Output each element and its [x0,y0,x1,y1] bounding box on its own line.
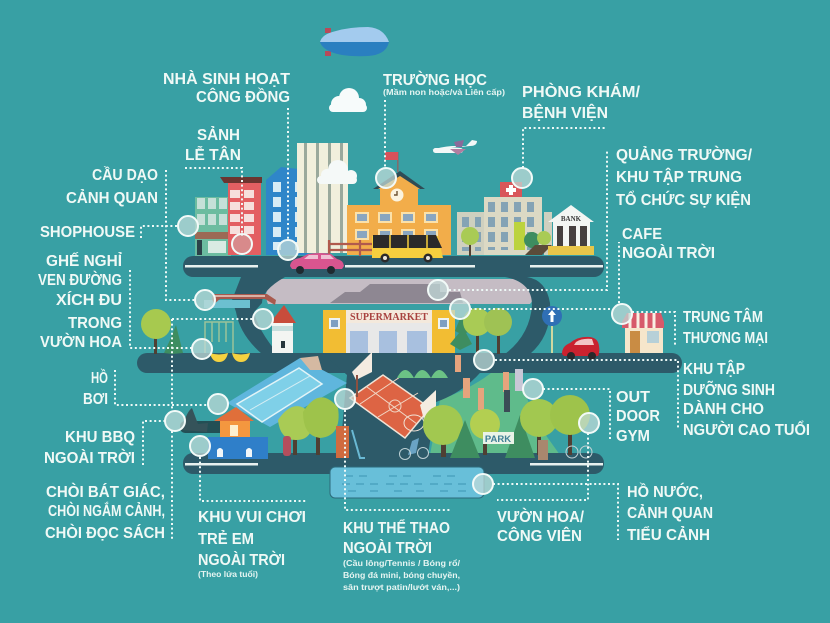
small house [270,305,296,353]
label: Vườn hoa công viên: VƯỜN HOA/ [497,508,585,526]
middle road and plaza [137,353,682,373]
cyclist [400,438,428,460]
pool [227,356,347,427]
park trees and sign: PARK [485,434,511,445]
label: Khu tập dưỡng sinh: DÀNH CHO [683,401,764,418]
label: Chòi: CHÒI BÁT GIÁC, [46,483,165,501]
dotted leader lines [115,100,678,540]
label: Hồ bơi: HỒ [91,369,108,387]
trees near hospital [461,222,552,256]
label: Nhà sinh hoạt cộng đồng: CÔNG ĐỒNG [196,88,290,106]
label: Quảng trường: TỔ CHỨC SỰ KIỆN [616,191,751,209]
label: Cầu dạo cảnh quan: CẢNH QUAN [66,190,158,207]
bottom road [183,453,604,474]
trees by playground [278,397,365,458]
label: Out door gym: GYM [616,428,650,445]
illustration: cloud on tower [317,160,357,184]
cafe [622,313,664,353]
road sign [542,306,562,353]
label: Hồ bơi [83,369,108,408]
label: Hồ nước: HỒ NƯỚC, [627,483,703,501]
label: Khu vui chơi trẻ em: KHU VUI CHƠI [198,509,306,526]
building: community red tower [220,177,262,255]
label: Khu thể thao ngoài trời: Bóng đá mini, bóng chuyền, [343,571,460,580]
label: Trung tâm thương mại: THƯƠNG MẠI [683,330,768,347]
label: Out door gym: DOOR [616,408,660,425]
fence [329,240,372,256]
bridge [204,294,276,308]
label: Trung tâm thương mại [683,308,768,347]
top road [183,256,604,277]
joggers [455,355,523,412]
label: Vườn hoa công viên: CÔNG VIÊN [497,527,582,545]
label: Quảng trường: KHU TẬP TRUNG [616,168,742,186]
label: Hồ nước [627,483,713,544]
curved ramps [232,277,285,354]
label: Khu BBQ: KHU BBQ [65,429,135,446]
label: Phòng khám: PHÒNG KHÁM/ [522,83,641,101]
trees behind supermarket [450,308,512,354]
label: Chòi: CHÒI NGẮM CẢNH, [48,502,165,520]
label: Ghế nghỉ, xích đu: VEN ĐƯỜNG [38,271,122,289]
building: bank [548,205,594,255]
supermarket: SUPERMARKET [350,312,428,323]
basketball court [350,352,436,438]
label: Trường học: (Mầm non hoặc/và Liên cấp) [383,88,505,97]
label: Hồ bơi: BƠI [83,391,108,408]
bushes [397,370,448,378]
label: Ghế nghỉ, xích đu: XÍCH ĐU [56,292,122,309]
illustration: plane [432,140,477,155]
pavilion [208,437,268,459]
label: Cầu dạo cảnh quan: CẦU DẠO [92,167,158,184]
hotspot markers [165,168,632,494]
label: Khu tập dưỡng sinh: KHU TẬP [683,360,745,378]
lake [330,467,484,498]
label: Hồ nước: CẢNH QUAN [627,505,713,522]
label: Cafe ngoài trời [622,226,715,262]
label: Khu thể thao ngoài trời [343,519,461,592]
label: Quảng trường: QUẢNG TRƯỜNG/ [616,146,753,164]
label: Khu BBQ: NGOÀI TRỜI [44,449,135,467]
label: Cafe ngoài trời: CAFE [622,226,662,243]
label: Khu tập dưỡng sinh: DƯỠNG SINH [683,381,775,399]
car: pink [290,253,344,274]
park green [430,365,560,455]
label: Ghế nghỉ, xích đu: TRONG [68,315,122,332]
label: Phòng khám: BỆNH VIỆN [522,104,608,122]
label: Hồ nước: TIỂU CẢNH [627,526,710,544]
label: Ghế nghỉ, xích đu [38,253,123,351]
illustration: cloud [329,88,367,112]
building: gray block [457,212,484,255]
illustration: blimp [320,27,389,56]
label: Ghế nghỉ, xích đu: VƯỜN HOA [40,333,122,351]
building: school [347,152,451,255]
label: Khu vui chơi trẻ em [198,509,306,579]
label: Khu vui chơi trẻ em: NGOÀI TRỜI [198,551,285,569]
supermarket [323,310,455,353]
small BBQ strip [180,421,230,433]
label: Khu vui chơi trẻ em: (Theo lứa tuổi) [198,570,258,579]
park trees and sign [423,395,592,460]
label: Khu vui chơi trẻ em: TRẺ EM [198,531,254,548]
label: Khu thể thao ngoài trời: KHU THỂ THAO [343,519,450,537]
building: blue tower [266,167,308,255]
label: Cầu dạo cảnh quan [66,167,158,207]
label: Shophouse: SHOPHOUSE [40,224,135,241]
label: Sảnh lễ tân: LỄ TÂN [185,146,241,164]
label: Ghế nghỉ, xích đu: GHẾ NGHỈ [46,253,123,270]
label: Vườn hoa công viên [497,508,585,545]
label: Khu thể thao ngoài trời: (Cầu lông/Tennis / Bóng rổ/ [343,559,461,568]
label: Trung tâm thương mại: TRUNG TÂM [683,308,763,326]
building: bank: BANK [561,215,582,223]
label: Chòi [45,483,165,542]
label: Cafe ngoài trời: NGOÀI TRỜI [622,244,715,262]
bus [372,235,443,262]
label: Khu tập dưỡng sinh [683,360,810,439]
label: Khu thể thao ngoài trời: sân trượt patin/lướt ván,...) [343,583,460,592]
label: Sảnh lễ tân [185,127,241,164]
label: Khu BBQ [44,429,135,467]
label: Nhà sinh hoạt cộng đồng [163,71,291,106]
label: Out door gym [616,389,660,445]
label: Sảnh lễ tân: SẢNH [197,127,240,144]
label: Khu thể thao ngoài trời: NGOÀI TRỜI [343,539,432,557]
building: shophouse [195,197,231,256]
label: Chòi: CHÒI ĐỌC SÁCH [45,524,165,542]
overpass plaza [266,279,535,304]
label: Trường học: TRƯỜNG HỌC [383,71,487,89]
left park: trees and swing [141,309,250,362]
building: hospital [484,182,552,255]
BBQ house [182,407,254,445]
label: Khu tập dưỡng sinh: NGƯỜI CAO TUỔI [683,421,810,439]
building: striped tower [297,143,348,253]
car: red [562,337,599,360]
label: Trường học [383,71,505,97]
road network [137,256,682,474]
label: Out door gym: OUT [616,389,651,406]
label: Phòng khám [522,83,641,122]
label: Quảng trường [616,146,753,209]
label: Nhà sinh hoạt cộng đồng: NHÀ SINH HOẠT [163,71,291,88]
